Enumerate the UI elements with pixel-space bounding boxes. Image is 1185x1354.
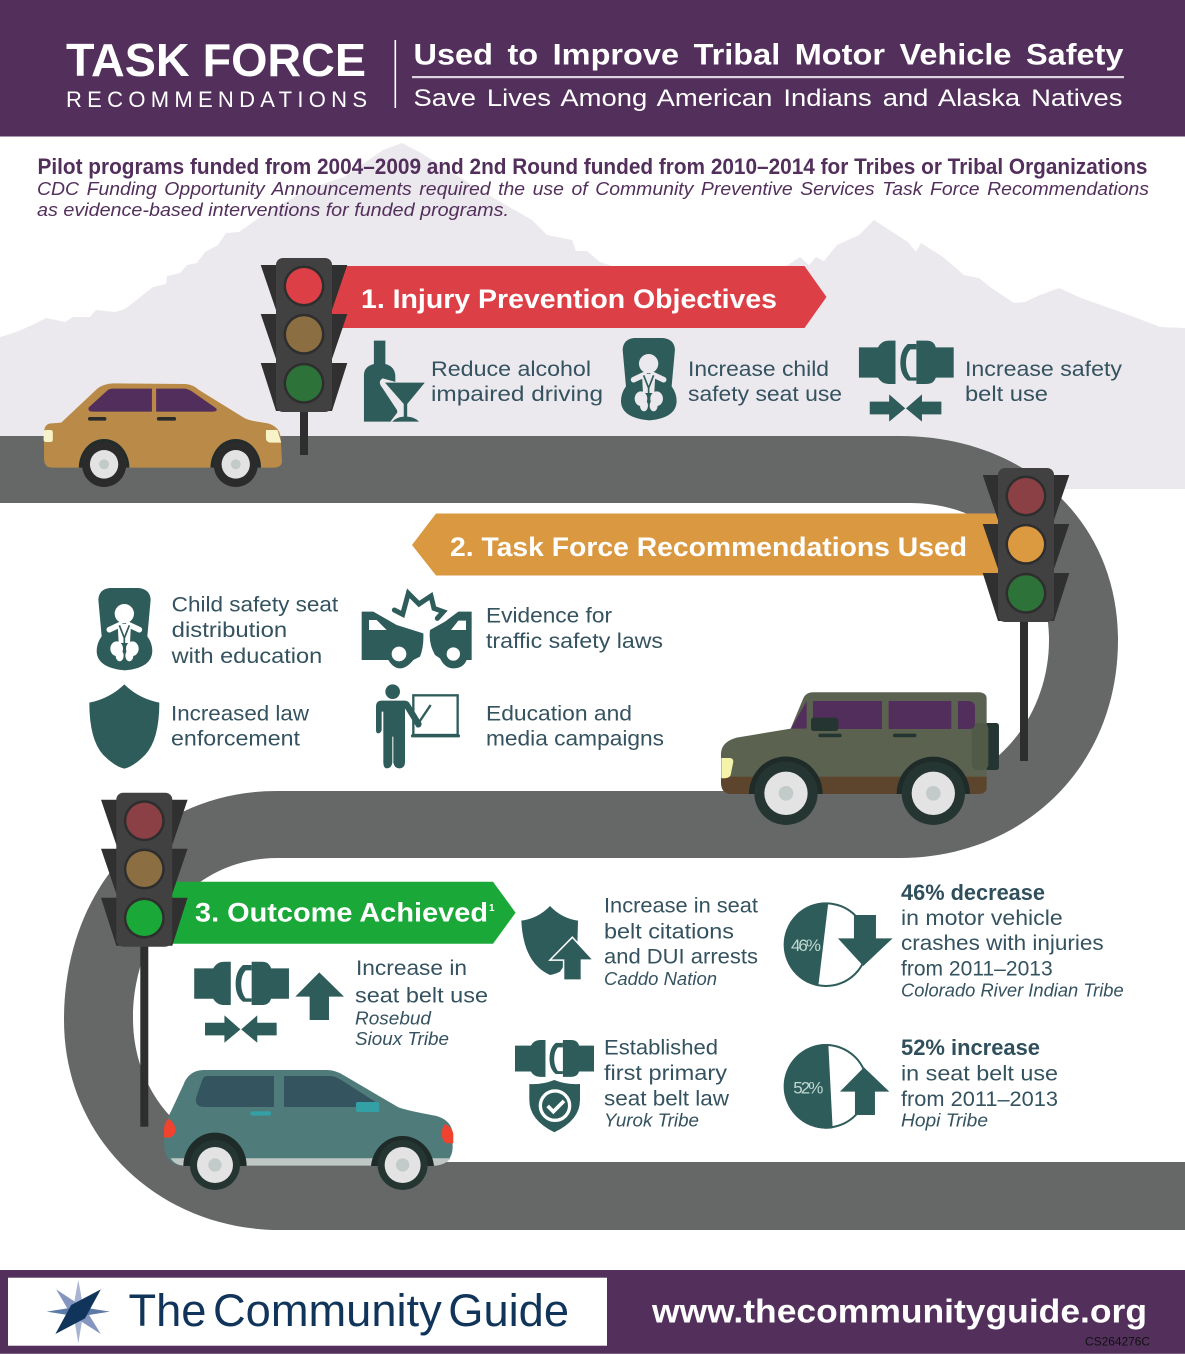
text: increase in seat belt citations, caddo nation (604, 894, 758, 989)
teal car (164, 1070, 453, 1190)
text: increase child safety seat use: Increase child (688, 358, 829, 381)
green truck (721, 692, 999, 825)
text: increased law enforcement (171, 703, 310, 751)
document code: CS264276C (1085, 1337, 1150, 1349)
intro text (37, 154, 1149, 220)
website url: www.thecommunityguide.org (651, 1293, 1147, 1330)
subtitle: Save Lives Among American Indians and Alaska Natives (414, 85, 1122, 112)
title: task force recommendations (66, 34, 367, 112)
text: increase in seat belt use, rosebud sioux tribe: Increase in (356, 957, 467, 980)
text: increase child safety seat use (688, 358, 842, 406)
text: increase in seat belt use, rosebud sioux tribe: Rosebud (355, 1008, 432, 1028)
icon: crash (362, 593, 472, 668)
logo text: The Community Guide (128, 1285, 569, 1336)
icon: shield with up arrow (521, 906, 592, 979)
logo: community guide star (47, 1280, 110, 1343)
text: increase in seat belt use, rosebud sioux tribe: Sioux Tribe (355, 1029, 449, 1049)
banner 1: injury prevention objectives (325, 266, 826, 328)
text: established first primary seat belt law, yurok tribe: Established (604, 1036, 718, 1059)
text: established first primary seat belt law, yurok tribe (604, 1036, 730, 1131)
title: task force recommendations: TASK FORCE (66, 34, 366, 86)
icon: seat belt with arrows (859, 341, 954, 422)
text: increase in seat belt use, rosebud sioux tribe (355, 957, 488, 1049)
text: 52 percent increase: 52% increase (901, 1035, 1040, 1060)
text: established first primary seat belt law, yurok tribe: Yurok Tribe (604, 1111, 699, 1131)
text: increase in seat belt citations, caddo nation: Caddo Nation (604, 969, 717, 989)
banner 1: injury prevention objectives: 1. Injury Prevention Objectives (361, 284, 777, 314)
text: increase in seat belt citations, caddo nation: Increase in seat (604, 894, 758, 917)
title: task force recommendations: RECOMMENDATIONS (66, 87, 367, 112)
text: 46 percent decrease: crashes with injuries (901, 932, 1104, 955)
traffic light 3 (101, 793, 188, 1127)
pie chart: 52 percent with up arrow (784, 1044, 889, 1129)
pie chart: 46 percent with down arrow: 46% (791, 936, 821, 955)
text: increase child safety seat use: safety seat use (688, 383, 842, 406)
text: increase in seat belt citations, caddo nation: belt citations (604, 920, 734, 943)
text: education and media campaigns: Education and (486, 703, 632, 726)
text: 52 percent increase: in seat belt use (901, 1063, 1058, 1086)
text: 52 percent increase: Hopi Tribe (901, 1111, 988, 1131)
pie chart: 52 percent with up arrow: 52% (793, 1078, 823, 1097)
footer (0, 1270, 1185, 1354)
text: child safety seat distribution: distribution (172, 619, 287, 642)
text: evidence for traffic safety laws: traffic safety laws (486, 630, 663, 653)
text: increase safety belt use: belt use (965, 383, 1048, 406)
intro text: Pilot programs funded from 2004–2009 and 2nd Round funded from 2010–2014 for Tribes or Tribal Organizations (38, 154, 1148, 179)
icon: seat belt with shield check (515, 1040, 594, 1132)
subtitle (412, 38, 1124, 112)
pie chart: 46 percent with down arrow (784, 903, 893, 986)
banner 3: outcome achieved: 3. Outcome Achieved (195, 898, 488, 928)
text: child safety seat distribution (171, 594, 338, 668)
header band (0, 0, 1185, 137)
text: increased law enforcement: Increased law (171, 703, 310, 726)
text: evidence for traffic safety laws (486, 605, 663, 653)
text: reduce alcohol (431, 358, 603, 406)
intro text: as evidence-based interventions for funded programs. (37, 200, 509, 220)
icon: presenter at board (376, 684, 460, 768)
text: 52 percent increase: from 2011–2013 (901, 1088, 1058, 1111)
text: evidence for traffic safety laws: Evidence for (486, 605, 612, 628)
icon: alcohol bottle and glass (364, 341, 425, 422)
subtitle: Used to Improve Tribal Motor Vehicle Safety (414, 38, 1124, 72)
icon: child safety seat (621, 338, 677, 420)
text: increase safety belt use: Increase safety (965, 358, 1123, 381)
winding road (0, 436, 1185, 1230)
traffic light 1 (261, 258, 347, 455)
text: education and media campaigns (486, 703, 664, 751)
text: reduce alcohol: Reduce alcohol (431, 358, 591, 381)
text: 52 percent increase (901, 1035, 1058, 1131)
traffic light 2 (983, 468, 1069, 761)
tan car (44, 383, 282, 487)
text: increase in seat belt use, rosebud sioux tribe: seat belt use (355, 985, 488, 1008)
text: 46 percent decrease (901, 880, 1124, 1001)
text: increase in seat belt citations, caddo nation: and DUI arrests (604, 945, 758, 968)
banner 3: outcome achieved: 1 (489, 903, 495, 914)
text: education and media campaigns: media campaigns (486, 728, 664, 751)
mountains background (0, 143, 1185, 489)
text: established first primary seat belt law, yurok tribe: first primary (604, 1062, 728, 1085)
text: increased law enforcement: enforcement (171, 728, 300, 751)
text: 46 percent decrease: 46% decrease (901, 880, 1045, 905)
icon: seat belt with arrows and up arrow (194, 962, 344, 1043)
text: reduce alcohol: impaired driving (431, 383, 603, 406)
text: 46 percent decrease: from 2011–2013 (901, 958, 1053, 981)
text: 46 percent decrease: Colorado River Indian Tribe (901, 981, 1124, 1001)
text: 46 percent decrease: in motor vehicle (901, 907, 1063, 930)
text: child safety seat distribution: with education (171, 645, 322, 668)
text: established first primary seat belt law, yurok tribe: seat belt law (604, 1088, 730, 1111)
text: increase safety belt use (965, 358, 1123, 406)
banner 2: task force recommendations used (412, 514, 1005, 576)
banner 2: task force recommendations used: 2. Task Force Recommendations Used (450, 532, 967, 562)
text: child safety seat distribution: Child safety seat (172, 594, 338, 617)
icon: shield (89, 684, 159, 769)
intro text: CDC Funding Opportunity Announcements required the use of Community Preventive Services Task Force Recommendations (37, 179, 1149, 199)
icon: child safety seat (97, 588, 152, 670)
banner 3: outcome achieved (165, 882, 516, 944)
